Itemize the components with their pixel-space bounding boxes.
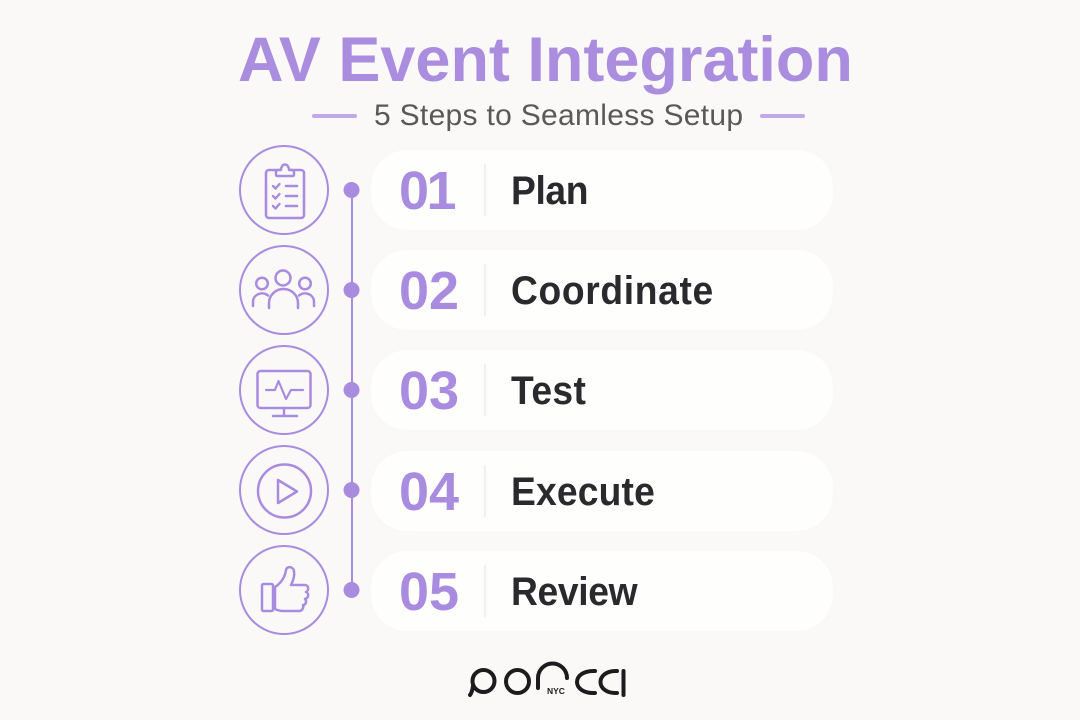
brand logo xyxy=(468,662,626,698)
step number 04: 04 xyxy=(399,462,459,522)
brand logo: NYC xyxy=(547,686,565,696)
step label Coordinate: Coordinate xyxy=(511,269,714,313)
icon: monitor with pulse xyxy=(239,345,329,435)
icon: team of people xyxy=(239,245,329,335)
step label Execute: Execute xyxy=(511,470,655,514)
step 2 card xyxy=(371,250,833,330)
title: AV Event Integration xyxy=(238,25,853,95)
step number 01: 01 xyxy=(399,161,454,221)
step number 02: 02 xyxy=(399,261,459,321)
step label Test: Test xyxy=(511,369,586,413)
step 3 card xyxy=(371,350,833,430)
step number 03: 03 xyxy=(399,361,459,421)
step 1 card xyxy=(371,150,833,230)
icon: clipboard checklist xyxy=(239,145,329,235)
step label Review: Review xyxy=(511,570,637,614)
timeline connector with nodes xyxy=(344,182,360,598)
icon: thumbs up xyxy=(239,545,329,635)
step 5 card xyxy=(371,551,833,631)
subtitle with side dashes: 5 Steps to Seamless Setup xyxy=(374,99,743,132)
icon: play button xyxy=(239,445,329,535)
step 4 card xyxy=(371,451,833,531)
step number 05: 05 xyxy=(399,562,459,622)
step label Plan: Plan xyxy=(511,169,588,213)
